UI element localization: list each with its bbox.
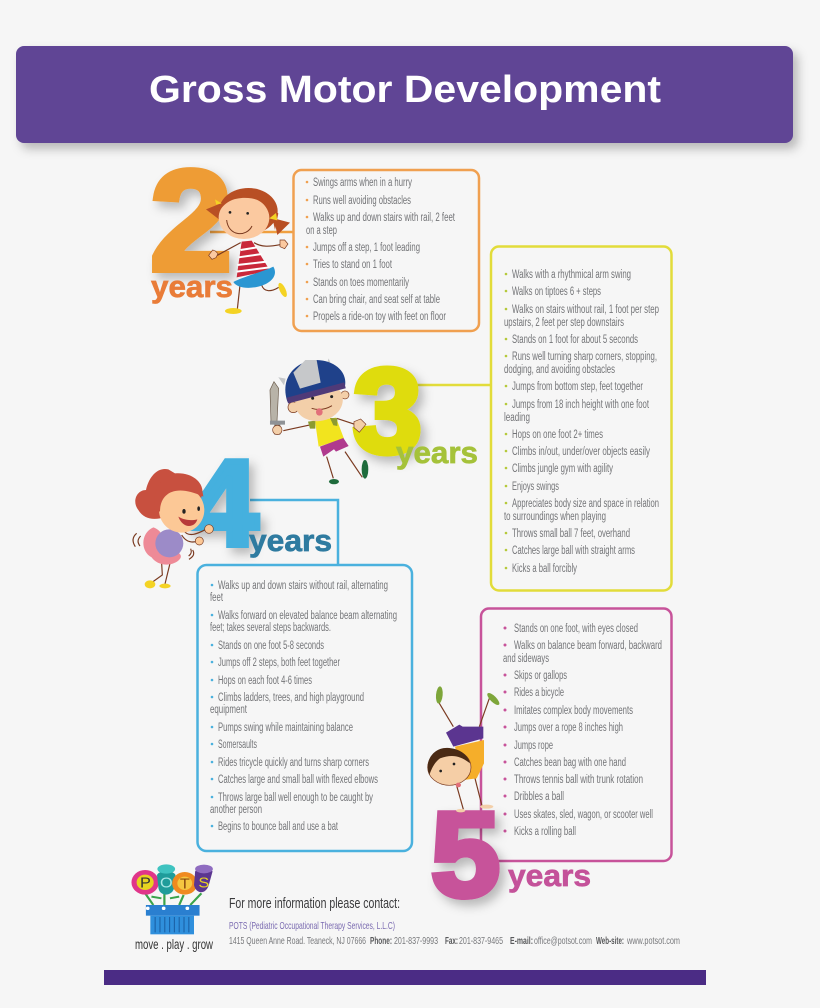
list: 3 years skills: Appreciates body size and space in relation bbox=[512, 498, 659, 510]
contact block: www.potsot.com bbox=[626, 935, 680, 947]
panel: 3 years bbox=[491, 246, 672, 590]
list: 3 years skills: dodging, and avoiding obstacles bbox=[504, 364, 615, 376]
footer bar bbox=[104, 970, 706, 985]
contact block: E-mail: bbox=[510, 935, 533, 947]
list: 3 years skills: Enjoys swings bbox=[512, 481, 559, 493]
list: 2 years skills: Can bring chair, and seat self at table bbox=[313, 294, 440, 306]
list: 5 years skills: Kicks a rolling ball bbox=[514, 826, 576, 838]
logo tagline: move . play . grow bbox=[135, 937, 213, 952]
contact block: 1415 Queen Anne Road. Teaneck, NJ 07666 bbox=[229, 935, 366, 947]
list: 2 years skills: Swings arms when in a hurry bbox=[313, 177, 412, 189]
contact block: office@potsot.com bbox=[534, 935, 592, 947]
list: 3 years skills: upstairs, 2 feet per step downstairs bbox=[504, 317, 624, 329]
title: Gross Motor Development bbox=[149, 69, 661, 111]
list: 5 years skills: Walks on balance beam forward, backward bbox=[514, 640, 662, 652]
list: 4 years skills: Begins to bounce ball and use a bat bbox=[218, 821, 339, 833]
contact block: 201-837-9993 bbox=[394, 935, 438, 947]
panel: 4 years bbox=[198, 565, 412, 851]
list: 3 years skills: Walks on tiptoes 6 + steps bbox=[512, 286, 601, 298]
list: 3 years skills: Throws small ball 7 feet, overhand bbox=[512, 528, 630, 540]
heading: 3 years bbox=[353, 344, 478, 478]
heading: 5 years: 5 bbox=[431, 788, 500, 922]
panel: 2 years bbox=[294, 170, 479, 331]
list: 3 years skills: Jumps from 18 inch height with one foot bbox=[512, 399, 650, 411]
list: 4 years skills: feet; takes several steps backwards. bbox=[210, 622, 331, 634]
list: 2 years skills: Tries to stand on 1 foot bbox=[313, 259, 393, 271]
list: 4 years skills: another person bbox=[210, 804, 262, 816]
list: 4 years skills: Stands on one foot 5-8 seconds bbox=[218, 640, 324, 652]
heading: 5 years: years bbox=[508, 858, 591, 893]
logo: T bbox=[180, 876, 190, 892]
list: 2 years skills bbox=[306, 177, 456, 323]
contact block: For more information please contact: bbox=[229, 896, 400, 912]
list: 4 years skills: Walks up and down stairs without rail, alternating bbox=[218, 580, 388, 592]
list: 5 years skills: Jumps over a rope 8 inches high bbox=[514, 722, 623, 734]
heading: 4 years: years bbox=[249, 523, 332, 558]
list: 3 years skills bbox=[504, 269, 659, 575]
list: 3 years skills: Kicks a ball forcibly bbox=[512, 563, 577, 575]
list: 3 years skills: Climbs jungle gym with agility bbox=[512, 463, 613, 475]
list: 4 years skills: Climbs ladders, trees, and high playground bbox=[218, 692, 364, 704]
list: 3 years skills: Jumps from bottom step, feet together bbox=[512, 381, 643, 393]
contact block: Web-site: bbox=[596, 935, 624, 947]
logo bbox=[131, 864, 213, 934]
list: 4 years skills: feet bbox=[210, 592, 224, 604]
list: 4 years skills: Hops on each foot 4-6 times bbox=[218, 675, 312, 687]
list: 4 years skills: Somersaults bbox=[218, 739, 257, 751]
list: 4 years skills: Throws large ball well enough to be caught by bbox=[218, 792, 373, 804]
list: 2 years skills: Jumps off a step, 1 foot leading bbox=[313, 242, 420, 254]
list: 5 years skills: Skips or gallops bbox=[514, 670, 567, 682]
list: 4 years skills: Pumps swing while maintaining balance bbox=[218, 722, 353, 734]
list: 3 years skills: Climbs in/out, under/over objects easily bbox=[512, 446, 650, 458]
contact block bbox=[229, 896, 680, 947]
list: 3 years skills: Walks on stairs without rail, 1 foot per step bbox=[512, 304, 659, 316]
heading: 5 years bbox=[431, 788, 591, 922]
illustration: boy in handstand bbox=[428, 686, 501, 812]
list: 3 years skills: Stands on 1 foot for about 5 seconds bbox=[512, 334, 638, 346]
bullets: 4 years bbox=[211, 584, 213, 827]
list: 5 years skills: Catches bean bag with one hand bbox=[514, 757, 626, 769]
contact block: Phone: bbox=[370, 935, 392, 947]
illustration: running girl bbox=[206, 188, 290, 314]
contact block: 201-837-9465 bbox=[459, 935, 503, 947]
list: 4 years skills: Catches large and small ball with flexed elbows bbox=[218, 774, 378, 786]
list: 3 years skills: to surroundings when playing bbox=[504, 511, 606, 523]
list: 4 years skills: Rides tricycle quickly and turns sharp corners bbox=[218, 757, 369, 769]
heading: 2 years: years bbox=[151, 269, 233, 304]
list: 2 years skills: Stands on toes momentarily bbox=[313, 277, 409, 289]
list: 4 years skills: Jumps off 2 steps, both feet together bbox=[218, 657, 340, 669]
list: 5 years skills: Imitates complex body movements bbox=[514, 705, 633, 717]
list: 3 years skills: Runs well turning sharp corners, stopping, bbox=[512, 351, 657, 363]
list: 5 years skills: and sideways bbox=[503, 653, 549, 665]
list: 5 years skills: Rides a bicycle bbox=[514, 687, 564, 699]
logo: O bbox=[160, 875, 173, 891]
list: 5 years skills: Uses skates, sled, wagon, or scooter well bbox=[514, 809, 653, 821]
heading: 2 years: 2 bbox=[150, 142, 232, 301]
contact block: POTS (Pediatric Occupational Therapy Services, L.L.C) bbox=[229, 920, 395, 932]
illustration: girl in tutu bbox=[133, 469, 213, 588]
contact block: Fax: bbox=[445, 935, 458, 947]
list: 5 years skills: Throws tennis ball with trunk rotation bbox=[514, 774, 643, 786]
list: 2 years skills: Walks up and down stairs with rail, 2 feet bbox=[313, 212, 456, 224]
list: 5 years skills: Dribbles a ball bbox=[514, 791, 564, 803]
bullets: 5 years bbox=[504, 626, 506, 832]
heading: 3 years: years bbox=[396, 435, 478, 470]
heading: 4 years bbox=[188, 435, 332, 571]
title banner bbox=[16, 46, 793, 143]
list: 3 years skills: Walks with a rhythmical arm swing bbox=[512, 269, 631, 281]
heading: 4 years: 4 bbox=[188, 435, 258, 571]
list: 3 years skills: Hops on one foot 2+ times bbox=[512, 429, 603, 441]
logo: P bbox=[140, 875, 151, 891]
bullets: 3 years bbox=[505, 273, 507, 569]
panel: 5 years bbox=[481, 608, 672, 861]
list: 3 years skills: leading bbox=[504, 412, 530, 424]
logo: S bbox=[198, 875, 209, 891]
list: 4 years skills: Walks forward on elevated balance beam alternating bbox=[218, 610, 397, 622]
connector lines bbox=[210, 232, 491, 565]
list: 3 years skills: Catches large ball with straight arms bbox=[512, 545, 635, 557]
list: 2 years skills: Runs well avoiding obstacles bbox=[313, 195, 411, 207]
bullets: 2 years bbox=[306, 181, 308, 317]
list: 5 years skills bbox=[503, 623, 662, 838]
list: 5 years skills: Stands on one foot, with eyes closed bbox=[514, 623, 638, 635]
list: 4 years skills bbox=[210, 580, 397, 833]
illustration: boy with sword bbox=[270, 358, 368, 484]
list: 4 years skills: equipment bbox=[210, 704, 248, 716]
list: 2 years skills: Propels a ride-on toy with feet on floor bbox=[313, 311, 446, 323]
list: 2 years skills: on a step bbox=[306, 225, 337, 237]
heading: 3 years: 3 bbox=[353, 344, 422, 478]
list: 5 years skills: Jumps rope bbox=[514, 740, 553, 752]
